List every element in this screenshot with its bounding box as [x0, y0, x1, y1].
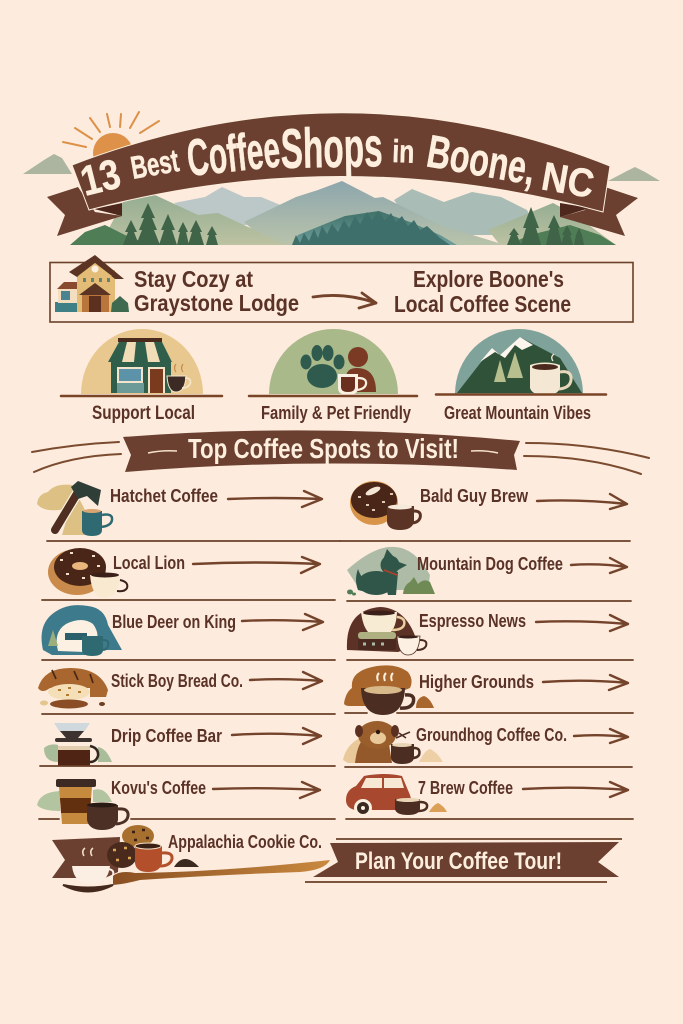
divider [345, 766, 632, 768]
label: Groundhog Coffee Co. [416, 725, 567, 745]
arrow [574, 729, 628, 743]
list item: Blue Deer on King [42, 605, 335, 660]
label: Kovu's Coffee [111, 778, 206, 798]
title text: in [392, 133, 415, 170]
text: stay cozy: Stay Cozy at [134, 266, 253, 292]
icon: red car and mug [346, 774, 447, 817]
banner tail right [560, 187, 638, 236]
icon: storefront dome [81, 329, 203, 394]
arrow [571, 558, 627, 573]
title text: Boone, [423, 125, 540, 195]
divider [345, 712, 633, 714]
icon: espresso stack [347, 607, 426, 655]
label: Appalachia Cookie Co. [168, 832, 322, 852]
label: Hatchet Coffee [110, 486, 218, 506]
icon: lodge [55, 255, 129, 312]
text: explore boone [394, 266, 571, 317]
text: stay cozy [134, 266, 299, 316]
list item: Espresso News [347, 607, 633, 660]
divider [347, 600, 631, 602]
heading text: Top Coffee Spots to Visit! [188, 433, 459, 464]
title text: Coffee [184, 121, 283, 188]
distant left peak [23, 154, 72, 174]
arrow [537, 494, 627, 509]
ribbon shape [313, 842, 619, 877]
list item: Drip Coffee Bar [40, 723, 335, 766]
panel: great mountain vibes [436, 329, 606, 423]
icon: paw and person dome [269, 329, 398, 395]
divider [340, 540, 630, 542]
base line [61, 395, 222, 397]
panel: Graystone Lodge callout [50, 255, 633, 322]
ribbon text: Plan Your Coffee Tour! [355, 848, 562, 875]
label: Drip Coffee Bar [111, 726, 222, 746]
arrow [543, 675, 628, 690]
icon: cup on saucer [63, 848, 113, 892]
icon: mound and mug [344, 665, 434, 715]
list item: Bald Guy Brew [340, 481, 630, 541]
list item: Local Lion [42, 548, 335, 600]
label: Mountain Dog Coffee [417, 554, 563, 574]
label: Higher Grounds [419, 672, 534, 692]
trees left [123, 203, 218, 245]
divider [47, 540, 340, 542]
divider [42, 713, 335, 715]
call to action ribbon [305, 839, 622, 882]
label: Family & Pet Friendly [261, 403, 411, 423]
title text: Shops [280, 115, 383, 180]
section heading ribbon [32, 430, 649, 474]
mountain scene [70, 181, 616, 245]
title text: NC [538, 155, 597, 207]
arrow [193, 557, 320, 573]
label: 7 Brew Coffee [418, 778, 513, 798]
title text [76, 115, 597, 207]
label: Blue Deer on King [112, 612, 236, 632]
label: Local Lion [113, 553, 185, 573]
arrow [536, 615, 628, 631]
arrow [228, 491, 322, 507]
icon: mountain dog [347, 547, 435, 596]
panel: support local [61, 329, 222, 424]
arrow [523, 782, 628, 797]
title text: 13 [76, 150, 125, 205]
icon: pour-over and carafe [44, 723, 112, 766]
label: Espresso News [419, 611, 526, 631]
label: Support Local [92, 403, 195, 424]
label: Great Mountain Vibes [444, 403, 591, 423]
list item: Stick Boy Bread Co. [38, 668, 335, 714]
divider [40, 765, 335, 767]
icon: bread loaf [38, 668, 108, 708]
icon: cookies and mug [107, 825, 199, 872]
ribbon rules [305, 839, 622, 882]
label: Bald Guy Brew [420, 486, 529, 506]
divider [347, 659, 633, 661]
trees right [507, 207, 584, 245]
divider [42, 659, 335, 661]
divider [346, 818, 633, 820]
list item: Kovu's Coffee [37, 778, 335, 830]
banner tail left [47, 187, 122, 236]
swooshes [32, 442, 649, 474]
header: title banner with mountains [23, 112, 660, 245]
distant right peak [608, 167, 660, 181]
list item: Groundhog Coffee Co. [343, 721, 632, 767]
list item: Mountain Dog Coffee [347, 547, 631, 601]
list item: Hatchet Coffee [37, 481, 340, 541]
icon: sun with rays [63, 112, 159, 173]
divider [39, 818, 335, 820]
icon: hatchet and mug [37, 481, 112, 536]
arrow [213, 782, 320, 798]
icon: mountain and mug dome [455, 329, 583, 395]
arrow [232, 728, 321, 744]
icon: wooden spoon [113, 860, 330, 885]
forest ridge [292, 211, 450, 245]
base line [249, 395, 417, 397]
text: stay cozy: Graystone Lodge [134, 290, 299, 316]
arrow [313, 293, 376, 308]
label: Stick Boy Bread Co. [111, 671, 243, 691]
ribbon [123, 430, 520, 472]
icon: donut and mug [48, 548, 127, 598]
icon: takeaway cup and mug [37, 779, 128, 830]
list item: 7 Brew Coffee [346, 774, 633, 819]
dashes [148, 451, 498, 453]
text: explore boone: Explore Boone's [413, 266, 564, 292]
text: explore boone: Local Coffee Scene [394, 291, 571, 317]
icon: donut and dark mug [350, 481, 420, 530]
title text: Best [128, 142, 182, 186]
panel: family and pet friendly [249, 329, 417, 423]
main title ribbon [72, 113, 610, 212]
ribbon [52, 837, 120, 878]
arrow [242, 614, 323, 630]
list item: Appalachia Cookie Co. [52, 825, 330, 892]
divider [42, 599, 335, 601]
icon: groundhog and mug [343, 721, 443, 764]
icon: blue deer scene [42, 605, 122, 656]
base line [436, 393, 606, 396]
arrow [250, 672, 322, 689]
list item: Higher Grounds [344, 665, 633, 715]
